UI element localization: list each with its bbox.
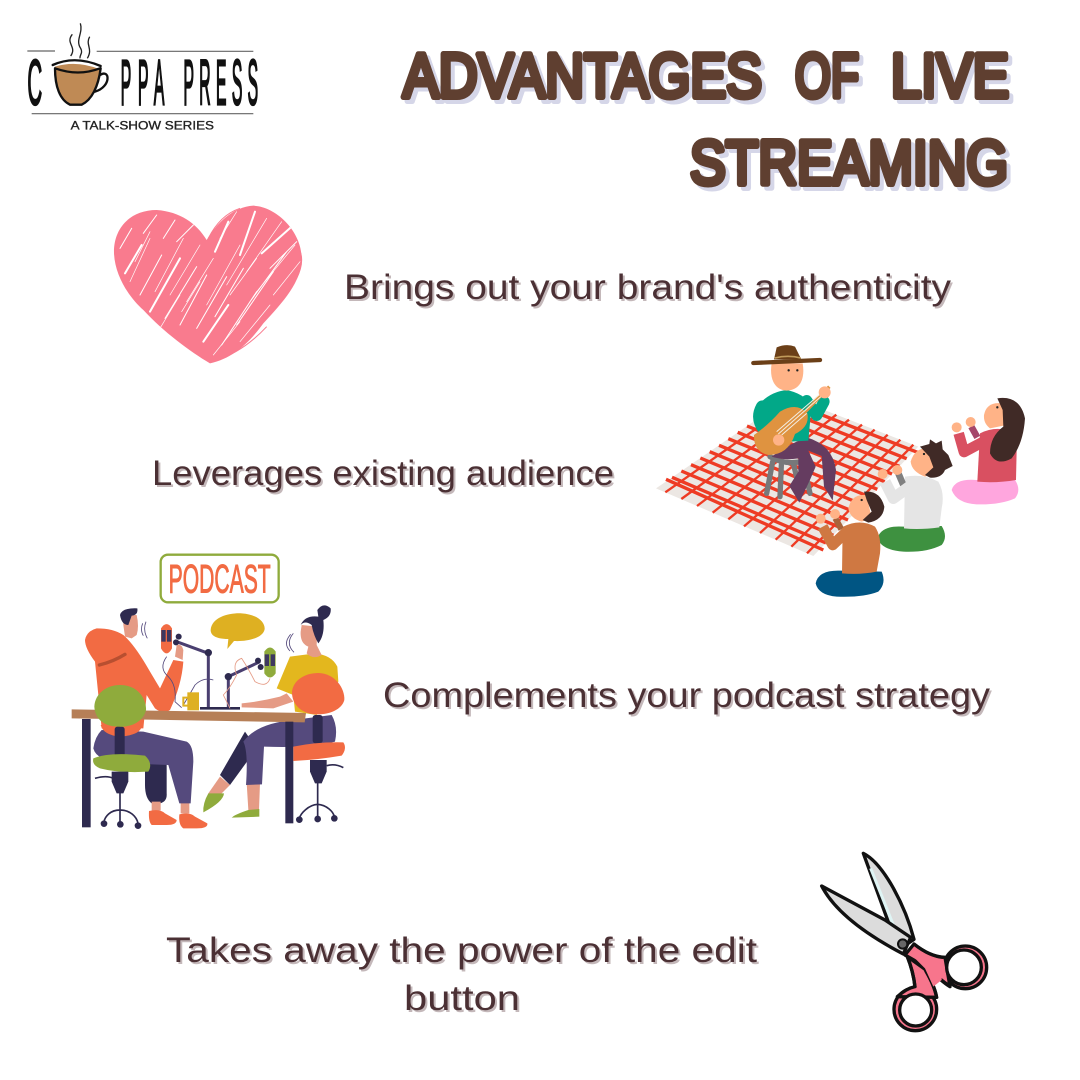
handles [944,946,987,989]
text: edit button: Takes away the power of the edit [166,931,757,970]
title [403,42,1009,198]
ankles [152,798,189,813]
right host [203,605,338,818]
pivot screw [898,939,907,949]
trousers [93,730,193,803]
left host [85,608,207,828]
text: podcast strategy: Complements your podcast strategy [383,676,991,715]
icon: steam [70,23,90,58]
title: LIVE [891,42,1009,111]
logo wordmark: C [27,48,42,119]
logo tagline: A TALK-SHOW SERIES [71,118,214,132]
logo wordmark: PRESS [183,47,263,118]
guitar [754,407,808,455]
stool [767,457,810,497]
legs [772,437,836,503]
hat [774,345,801,359]
logo rules [27,51,253,114]
mug [183,692,199,710]
head [771,363,803,391]
text: edit button: button [404,979,520,1018]
title: ADVANTAGES [403,42,762,111]
logo wordmark: PPA [121,47,171,118]
torso [758,390,812,443]
trousers back leg [145,758,167,803]
title: OF [795,42,859,111]
text: edit button [166,931,757,1018]
guitar player [753,345,836,503]
speech bubble [211,613,265,649]
illustration: podcast hosts [72,555,345,829]
right chair [292,673,345,823]
head [123,615,138,638]
text: authenticity: Brings out your brand's authenticity [344,268,952,307]
shoes [149,810,207,828]
picnic blanket [656,397,918,556]
podcast badge [161,555,279,602]
icon: scissors [822,853,987,1031]
left chair [93,685,150,829]
child: boy in white [877,439,953,552]
illustration: picnic guitar scene [656,345,1025,597]
table [72,709,306,827]
hoodie [85,628,183,728]
icon: scribbled heart [114,206,302,363]
text: audience: Leverages existing audience [152,454,614,493]
microphones and booms [161,624,276,708]
child: girl in pink [952,398,1025,504]
title: STREAMING [690,129,1008,198]
child: boy in orange [816,492,884,597]
icon: coffee cup [53,60,108,105]
logo wordmark [27,47,263,119]
logo: Coppa Press [27,23,263,132]
podcast badge: PODCAST [169,558,271,602]
blades [863,853,914,947]
